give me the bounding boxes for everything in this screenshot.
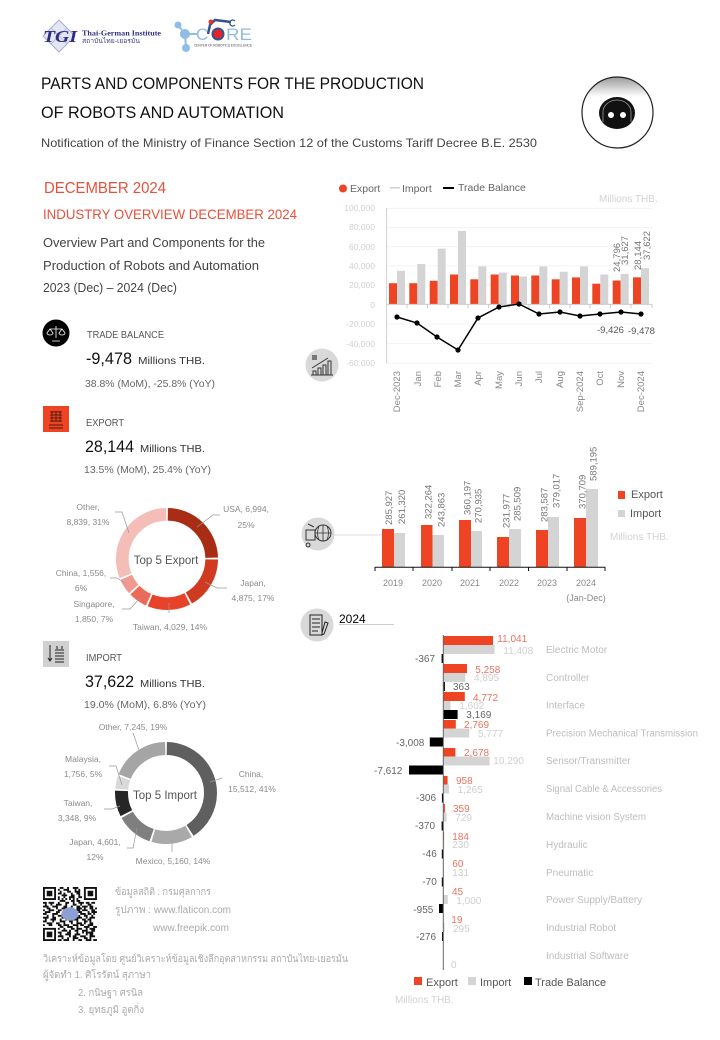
chart: export, import and trade balance by product: Hydraulic xyxy=(546,840,588,851)
unit label: monthly chart: Millions THB. xyxy=(599,194,658,205)
chart: export, import and trade balance by product: 1,602 xyxy=(459,701,485,712)
donut chart: top 5 import: Mexico, 5,160, 14% xyxy=(136,856,211,866)
chart: export, import and trade balance by product: -70 xyxy=(422,877,437,888)
chart: export, import and trade balance by product: 10,290 xyxy=(493,756,524,767)
chart: monthly export, import and trade balance: Aug xyxy=(555,371,566,388)
chart: yearly export and import: 370,709 xyxy=(578,475,588,509)
chart: export, import and trade balance by product: 230 xyxy=(452,840,469,851)
text block: sources: ข้อมูลสถิติ : กรมศุลกากร xyxy=(115,886,212,898)
unit label: product chart: Millions THB. xyxy=(395,995,454,1006)
chart: export, import and trade balance by product: -46 xyxy=(422,849,437,860)
donut chart: top 5 import: 12% xyxy=(86,852,104,862)
donut chart: top 5 import: Japan, 4,601, xyxy=(69,837,121,847)
donut chart: top 5 import: 1,756, 5% xyxy=(64,769,103,779)
logo: CORE Center of Robotics Excellence xyxy=(174,20,253,52)
donut chart: top 5 export: 4,875, 17% xyxy=(231,593,275,603)
chart: export, import and trade balance by product: Pneumatic xyxy=(546,868,593,879)
chart: export, import and trade balance by product: -3,008 xyxy=(396,738,425,749)
donut chart: top 5 export: 8,839, 31% xyxy=(66,517,110,527)
panel: trade balance: Millions THB. xyxy=(138,355,205,367)
chart: export, import and trade balance by product: 60 xyxy=(452,859,464,870)
chart: monthly export, import and trade balance: -40,000 xyxy=(346,339,375,349)
chart: yearly export and import: (Jan-Dec) xyxy=(566,593,606,603)
chart: export, import and trade balance by product: 131 xyxy=(452,868,469,879)
donut chart: top 5 export: 1,850, 7% xyxy=(75,614,114,624)
legend: yearly chart: Export xyxy=(631,489,663,501)
text block: sources: รูปภาพ : www.flaticon.com xyxy=(115,905,231,916)
chart: monthly export, import and trade balance: Nov xyxy=(616,371,627,388)
donut chart: top 5 import xyxy=(58,722,276,866)
chart: export, import and trade balance by product: 1,265 xyxy=(458,785,483,796)
chart: monthly export, import and trade balance: 40,000 xyxy=(349,261,375,271)
donut chart: top 5 import: Malaysia, xyxy=(65,754,101,764)
chart: monthly export, import and trade balance: 20,000 xyxy=(349,280,375,290)
chart: export, import and trade balance by product: 19 xyxy=(451,915,463,926)
legend: product chart: Trade Balance xyxy=(535,977,606,989)
text block: analysts credits: 3. ยุทธภูมิ อูตกิ่ง xyxy=(78,1002,144,1016)
donut chart: top 5 export xyxy=(56,502,275,632)
chart: export, import and trade balance by product: -955 xyxy=(413,905,434,916)
logo: Thai-German Institute: TGI xyxy=(43,27,79,46)
chart: monthly export, import and trade balance xyxy=(344,203,655,412)
chart: yearly export and import: 285,509 xyxy=(512,487,524,521)
chart: yearly export and import: 2019 xyxy=(383,578,403,588)
text block: sources xyxy=(115,886,231,934)
donut chart: top 5 import: China, xyxy=(239,769,263,779)
panel: export: EXPORT xyxy=(86,417,125,429)
chart: export, import and trade balance by product: Machine vision System xyxy=(546,812,646,823)
legend: monthly chart: Trade Balance xyxy=(458,182,526,194)
panel: import xyxy=(43,641,206,711)
chart: export, import and trade balance by product: 729 xyxy=(455,813,472,824)
chart: yearly export and import: 283,587 xyxy=(540,488,550,522)
text block: overview: Overview Part and Components for the xyxy=(43,236,265,250)
chart: yearly export and import: 589,195 xyxy=(588,447,600,481)
chart: export, import and trade balance by product: 2,769 xyxy=(464,720,489,731)
chart: yearly export and import: 322,264 xyxy=(424,485,434,519)
title xyxy=(41,75,424,122)
chart: export, import and trade balance by product: 5,258 xyxy=(475,665,501,676)
chart: export, import and trade balance by product: 11,408 xyxy=(503,646,534,657)
text block: sources: www.freepik.com xyxy=(152,923,229,934)
donut chart: top 5 export: China, 1,556, xyxy=(56,568,106,578)
chart: monthly export, import and trade balance: Jun xyxy=(514,371,525,386)
chart: export, import and trade balance by product: 958 xyxy=(456,776,473,787)
chart: monthly export, import and trade balance: 37,622 xyxy=(642,231,653,260)
chart: yearly export and import: 285,927 xyxy=(384,491,395,525)
chart: monthly export, import and trade balance: 24,796 xyxy=(612,243,623,272)
donut chart: top 5 import: 3,348, 9% xyxy=(58,813,97,823)
chart: yearly export and import: 2022 xyxy=(499,578,519,588)
chart: yearly export and import xyxy=(375,447,606,603)
unit label: yearly chart: Millions THB. xyxy=(610,532,669,543)
chart: export, import and trade balance by product: 11,041 xyxy=(497,634,528,645)
chart: monthly export, import and trade balance: Jul xyxy=(534,371,545,383)
icon: robot head xyxy=(582,77,653,148)
chart: export, import and trade balance by product: 1,000 xyxy=(456,896,482,907)
legend: yearly chart: Import xyxy=(630,508,661,520)
chart: export, import and trade balance by product: Controller xyxy=(546,673,590,684)
text block: analysts credits: 2. กนิษฐา ศรนิล xyxy=(78,988,143,999)
chart: monthly export, import and trade balance: Oct xyxy=(595,371,606,386)
chart: monthly export, import and trade balance: -20,000 xyxy=(346,319,375,329)
logo: CORE Center of Robotics Excellence: CENTER OF ROBOTICS EXCELLENCE xyxy=(194,44,253,48)
chart: export, import and trade balance by product: 4,772 xyxy=(473,693,498,704)
panel: import: 37,622 xyxy=(85,672,134,691)
text block: analysts credits: วิเคราะห์ข้อมูลโดย ศูนย์วิเคราะห์ข้อมูลเชิงลึกอุตสาหกรรม สถาบันไทย-เยอรมัน xyxy=(43,952,348,965)
legend: product chart: Import xyxy=(480,977,511,989)
chart: export, import and trade balance by product: 4,895 xyxy=(474,673,499,684)
panel: export xyxy=(43,406,211,476)
donut chart: top 5 export: Other, xyxy=(76,502,100,512)
text block: overview xyxy=(43,236,265,295)
chart: monthly export, import and trade balance: Sep-2024 xyxy=(575,371,586,412)
donut chart: top 5 export: Singapore, xyxy=(73,599,115,609)
chart: export, import and trade balance by product: -367 xyxy=(415,654,435,665)
title: PARTS AND COMPONENTS FOR THE PRODUCTION xyxy=(41,75,424,93)
chart: yearly export and import: 379,017 xyxy=(552,474,562,508)
chart: export, import and trade balance by product: -306 xyxy=(416,793,436,804)
icon: scales xyxy=(42,320,70,346)
panel: import: 19.0% (MoM), 6.8% (YoY) xyxy=(84,699,206,711)
legend: monthly chart xyxy=(339,182,526,195)
chart: export, import and trade balance by product: Industrial Software xyxy=(546,951,629,962)
icon: globe and logistics xyxy=(302,518,382,550)
donut chart: top 5 export: USA, 6,994, xyxy=(223,504,269,514)
chart: monthly export, import and trade balance: Dec-2024 xyxy=(636,371,647,412)
chart: export, import and trade balance by product: 3,169 xyxy=(466,710,492,721)
panel: export: 28,144 xyxy=(85,437,134,456)
donut chart: top 5 export: Japan, xyxy=(240,578,266,588)
panel: trade balance: 38.8% (MoM), -25.8% (YoY) xyxy=(85,378,215,390)
chart: export, import and trade balance by product: Sensor/Transmitter xyxy=(546,756,631,767)
chart: export, import and trade balance by product: 5,777 xyxy=(478,729,503,740)
subtitle: Notification of the Ministry of Finance Section 12 of the Customs Tariff Decree B.E. 2530 xyxy=(41,136,537,150)
logo: Thai-German Institute: Thai-German Institute xyxy=(82,28,162,38)
logo: CORE Center of Robotics Excellence: C xyxy=(196,25,208,44)
chart: yearly export and import: 270,935 xyxy=(474,489,484,523)
icon: growth chart xyxy=(306,348,338,382)
donut chart: top 5 export: Taiwan, 4,029, 14% xyxy=(133,622,208,632)
text block: analysts credits: ผู้จัดทำ 1. ศิโรรัตน์ สุภาษา xyxy=(43,968,151,981)
donut chart: top 5 export: Top 5 Export xyxy=(134,555,199,567)
panel: export: 13.5% (MoM), 25.4% (YoY) xyxy=(84,464,211,476)
chart: monthly export, import and trade balance: 0 xyxy=(370,300,375,310)
heading: industry overview: INDUSTRY OVERVIEW DECEMBER 2024 xyxy=(43,206,297,222)
panel: trade balance: TRADE BALANCE xyxy=(87,329,164,341)
chart: yearly export and import: 2024 xyxy=(576,578,596,588)
chart: export, import and trade balance by product: -7,612 xyxy=(374,766,403,777)
chart: yearly export and import: 243,863 xyxy=(436,493,448,527)
chart: monthly export, import and trade balance: -9,478 xyxy=(628,326,655,337)
icon: document and pen xyxy=(300,608,334,642)
donut chart: top 5 import: Taiwan, xyxy=(64,798,92,808)
chart: export, import and trade balance by product: Interface xyxy=(546,700,585,712)
legend: product chart xyxy=(414,977,606,989)
chart: export, import and trade balance by product: Industrial Robot xyxy=(546,923,616,934)
chart: yearly export and import: 2023 xyxy=(537,578,557,588)
panel: export: Millions THB. xyxy=(140,443,205,455)
chart: export, import and trade balance by product: Power Supply/Battery xyxy=(546,895,642,906)
chart: yearly export and import: 2020 xyxy=(422,578,442,588)
chart: monthly export, import and trade balance: 31,627 xyxy=(620,236,631,265)
title: OF ROBOTS AND AUTOMATION xyxy=(41,104,284,122)
panel: trade balance: -9,478 xyxy=(86,349,132,368)
chart: monthly export, import and trade balance: Dec-2023 xyxy=(392,371,403,412)
panel: import: IMPORT xyxy=(86,652,123,664)
chart: monthly export, import and trade balance: 80,000 xyxy=(349,222,375,232)
chart: export, import and trade balance by product: 184 xyxy=(452,832,469,843)
chart: export, import and trade balance by product: 45 xyxy=(452,887,464,898)
text block: overview: Production of Robots and Automation xyxy=(43,259,259,273)
chart: export, import and trade balance by product: Precision Mechanical Transmission xyxy=(546,728,698,740)
donut chart: top 5 import: Other, 7,245, 19% xyxy=(99,722,168,732)
chart: monthly export, import and trade balance: 100,000 xyxy=(344,203,375,213)
logo: CORE Center of Robotics Excellence: RE xyxy=(226,25,252,44)
heading: 2024: 2024 xyxy=(339,612,366,626)
icon: import cargo xyxy=(43,641,69,667)
chart: export, import and trade balance by product: Electric Motor xyxy=(546,645,608,656)
chart: yearly export and import: 2021 xyxy=(460,578,480,588)
chart: monthly export, import and trade balance: 60,000 xyxy=(349,242,375,252)
donut chart: top 5 export: 25% xyxy=(237,520,255,530)
panel: trade balance xyxy=(42,320,215,390)
chart: export, import and trade balance by product: 295 xyxy=(453,924,470,935)
chart: monthly export, import and trade balance: 28,144 xyxy=(633,241,644,270)
chart: monthly export, import and trade balance: Mar xyxy=(453,371,464,387)
chart: monthly export, import and trade balance: May xyxy=(494,371,505,389)
chart: monthly export, import and trade balance: Feb xyxy=(433,371,444,387)
legend: monthly chart: Import xyxy=(402,183,432,195)
chart: monthly export, import and trade balance: -9,426 xyxy=(597,325,624,336)
heading: December 2024: DECEMBER 2024 xyxy=(44,180,166,197)
chart: export, import and trade balance by product: -370 xyxy=(415,821,435,832)
donut chart: top 5 export: 6% xyxy=(75,583,88,593)
legend: product chart: Export xyxy=(426,977,458,989)
legend: yearly chart xyxy=(618,489,663,520)
legend: monthly chart: Export xyxy=(350,183,380,195)
logo: Thai-German Institute xyxy=(43,20,162,52)
chart: export, import and trade balance by product: 363 xyxy=(453,682,470,693)
chart: yearly export and import: 360,197 xyxy=(462,481,474,515)
chart: yearly export and import: 231,977 xyxy=(502,494,512,528)
chart: monthly export, import and trade balance: -60,000 xyxy=(346,358,375,368)
text block: overview: 2023 (Dec) – 2024 (Dec) xyxy=(43,281,177,295)
chart: export, import and trade balance by product xyxy=(374,634,698,971)
icon: QR code xyxy=(43,887,97,941)
donut chart: top 5 import: 15,512, 41% xyxy=(228,784,276,794)
chart: export, import and trade balance by product: -276 xyxy=(416,932,436,943)
chart: export, import and trade balance by product: 2,678 xyxy=(464,748,489,759)
text block: analysts credits xyxy=(43,952,348,1016)
heading: 2024 xyxy=(339,612,394,626)
chart: monthly export, import and trade balance: Jan xyxy=(413,371,424,386)
icon: export cargo xyxy=(43,406,69,432)
panel: import: Millions THB. xyxy=(140,678,205,690)
chart: export, import and trade balance by product: Signal Cable & Accessories xyxy=(546,784,662,795)
chart: export, import and trade balance by product: 359 xyxy=(453,804,470,815)
logo: Thai-German Institute: สถาบันไทย-เยอรมัน xyxy=(82,37,141,45)
donut chart: top 5 import: Top 5 Import xyxy=(133,790,198,802)
chart: yearly export and import: 261,320 xyxy=(397,490,408,524)
chart: monthly export, import and trade balance: Apr xyxy=(473,371,484,386)
chart: export, import and trade balance by product: 0 xyxy=(451,960,457,971)
